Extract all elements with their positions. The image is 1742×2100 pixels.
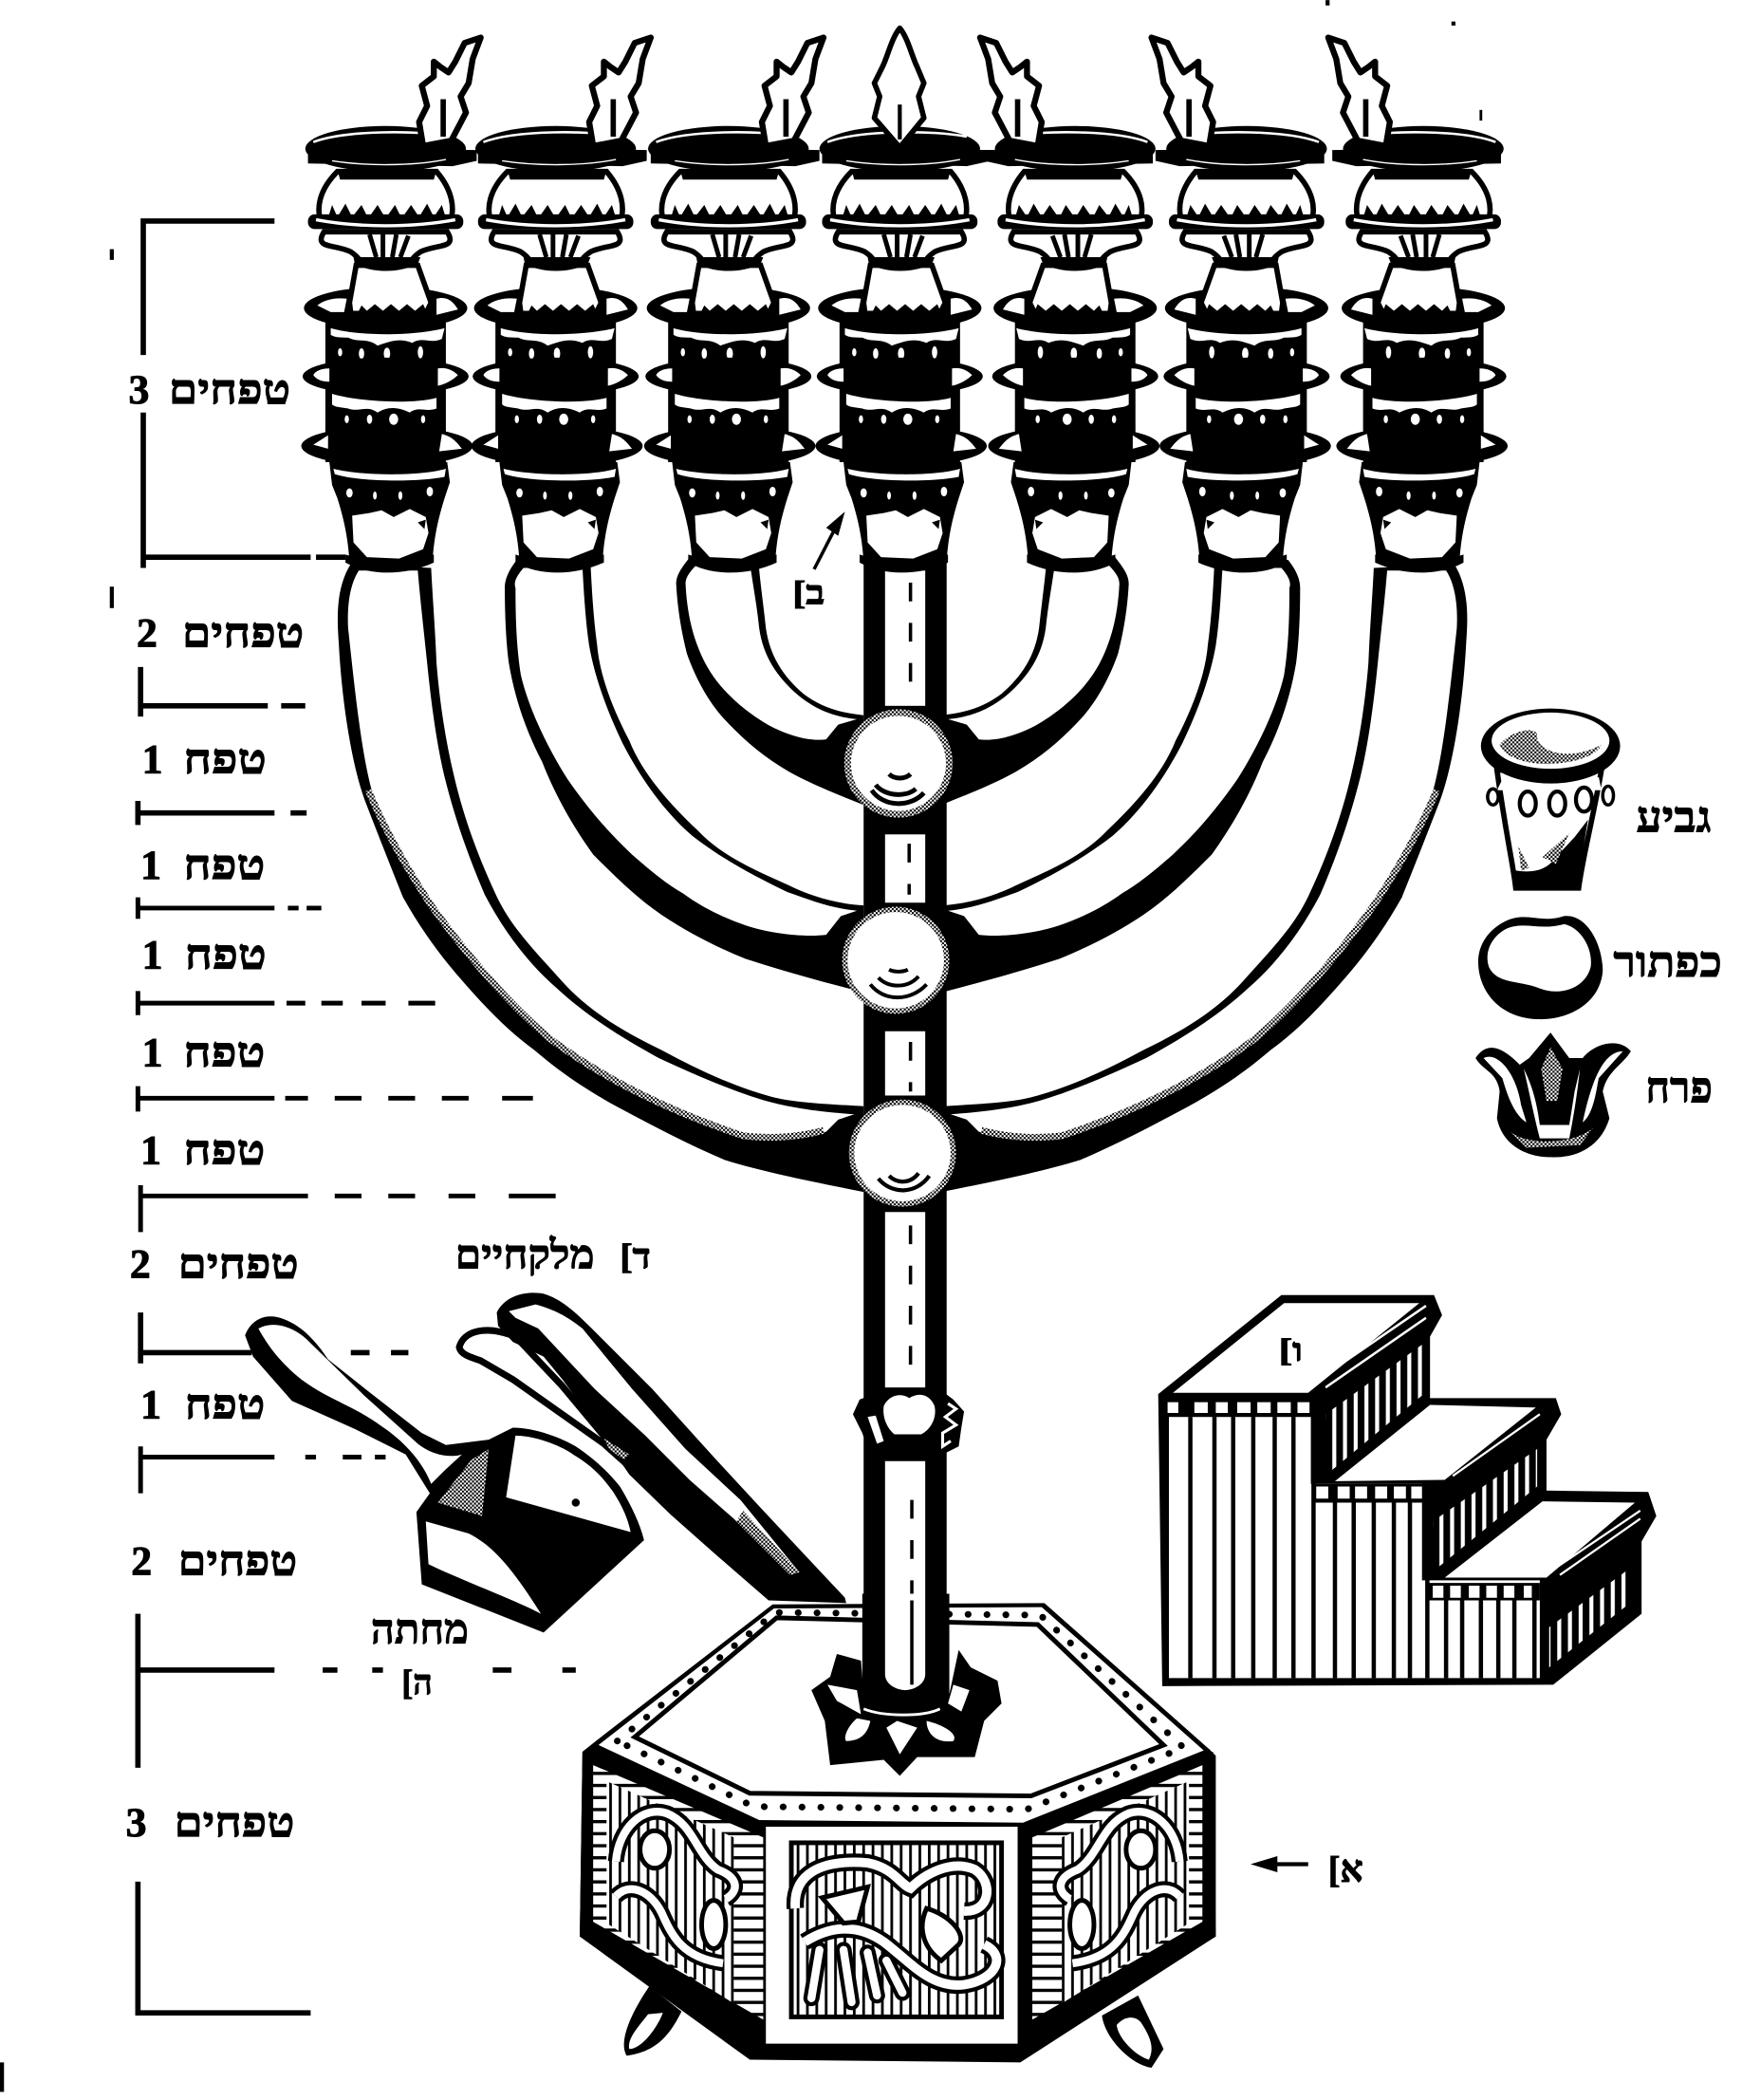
label: 1 tefach row 1: טפח	[183, 736, 267, 782]
dimension scale: left measurement column	[126, 221, 576, 2013]
stem lower over base	[862, 1593, 950, 1703]
callout: aleph arrow: [א	[1328, 1849, 1363, 1890]
label: 1 tefach row 4	[142, 1030, 265, 1075]
knot: small lower knob	[853, 1387, 964, 1458]
step 3 top	[1445, 1501, 1635, 1578]
label: 1 tefach row 5	[140, 1127, 265, 1173]
top dotted band	[599, 1608, 1204, 1823]
label: 3 tefachim bottom: טפחים	[174, 1800, 294, 1846]
label: 2 tefachim: 2	[137, 611, 158, 657]
label: 3 tefachim top: טפחים	[169, 367, 290, 413]
menorah central stem	[863, 552, 947, 1703]
label: 1 tefach row 6: 1	[140, 1383, 161, 1428]
label: malkachayim (tongs): [ד	[620, 1237, 651, 1276]
icon: kaftor knob	[1478, 916, 1603, 1019]
label: 1 tefach row 2	[140, 843, 265, 888]
label: 1 tefach row 1: 1	[142, 736, 162, 782]
label: machta: [ה	[401, 1663, 433, 1701]
label: 1 tefach row 4: 1	[142, 1030, 162, 1075]
front panel	[766, 1827, 1018, 2044]
upper arm and blade	[497, 1292, 846, 1603]
side risers	[1325, 1345, 1422, 1473]
step 2 top	[1335, 1404, 1536, 1481]
tick: 749	[138, 991, 436, 1015]
step 1 top	[1173, 1303, 1419, 1393]
label: 3 tefachim top	[128, 367, 290, 413]
label: 2 tefachim	[137, 611, 304, 657]
upper arm highlight	[509, 1305, 799, 1575]
label: 3 tefachim bottom	[126, 1800, 294, 1846]
label: vav: [ו	[1279, 1333, 1303, 1368]
tick: 1247	[138, 1614, 576, 1768]
knob: upper	[847, 713, 950, 814]
icon: gavia cup	[1481, 709, 1621, 888]
label: perach: פרח	[1645, 1065, 1713, 1112]
label: 2 tefachim lower: טפחים	[178, 1241, 299, 1287]
tick: 1010	[140, 1312, 408, 1364]
label: 2 tefachim lower	[130, 1241, 299, 1287]
callout: bet arrow: [ב	[792, 575, 825, 612]
base body	[580, 1603, 1215, 2062]
label: kaftor: כפתור	[1614, 938, 1722, 986]
callout: bet arrow	[792, 511, 844, 612]
label: 3 tefachim top: 3	[128, 367, 149, 413]
menorah knobs	[844, 713, 964, 1458]
label: 1 tefach row 4: טפח	[183, 1030, 265, 1075]
menorah branches	[338, 553, 1467, 1192]
label: gavia: גביע	[1637, 793, 1712, 841]
step silhouette	[1158, 1295, 1657, 1686]
label: machta: מחתה	[371, 1608, 469, 1653]
label: 1 tefach row 6: טפח	[185, 1383, 265, 1428]
icon: perach flower	[1475, 1032, 1631, 1158]
knob: middle	[844, 909, 947, 1012]
label: 1 tefach row 6	[140, 1383, 265, 1428]
knob: lower	[852, 1103, 954, 1204]
side panels	[580, 1752, 763, 2025]
icon: stem base flower	[811, 1650, 1002, 1775]
label: 2 tefachim third: טפחים	[178, 1539, 297, 1585]
lamps row	[302, 28, 1508, 572]
tick: 820	[138, 1087, 533, 1111]
lamp 7	[1328, 38, 1508, 572]
label: malkachayim (tongs)	[455, 1234, 651, 1278]
bracket: top section	[143, 221, 345, 567]
feet	[624, 1986, 1163, 2068]
label: 2 tefachim third: 2	[131, 1539, 152, 1585]
label: 1 tefach row 1	[142, 736, 267, 782]
tick: 607	[138, 801, 306, 825]
tick: 1088	[140, 1446, 385, 1494]
blade stipple	[603, 1439, 799, 1575]
label: 2 tefachim lower: 2	[130, 1241, 151, 1287]
icon: three steps (kevesh)	[1158, 1295, 1657, 1686]
icon: menorah base	[580, 1603, 1215, 2068]
base top	[635, 1618, 1163, 1796]
icon: tongs	[459, 1292, 846, 1603]
bracket: bottom section	[138, 1882, 310, 2013]
lamp 4 center	[815, 28, 991, 572]
lamp 3	[644, 38, 824, 572]
label: 3 tefachim bottom: 3	[126, 1800, 147, 1846]
label: 1 tefach row 2: 1	[140, 843, 161, 888]
lamp 2	[472, 38, 651, 572]
label: machta	[371, 1608, 469, 1701]
label: 1 tefach row 5: טפח	[183, 1127, 265, 1173]
tick: 527	[140, 667, 306, 716]
tick: 678	[138, 898, 322, 919]
label: 1 tefach row 2: טפח	[183, 843, 265, 888]
label: 1 tefach row 5: 1	[140, 1127, 161, 1173]
label: malkachayim (tongs): מלקחיים	[455, 1234, 595, 1278]
tick: 893	[140, 1185, 556, 1232]
label: 1 tefach row 3: טפח	[185, 932, 267, 977]
lamp 6	[1152, 38, 1331, 572]
label: 1 tefach row 3	[142, 932, 267, 977]
label: 1 tefach row 3: 1	[142, 932, 162, 977]
dots	[618, 1612, 1184, 1810]
lower arm	[459, 1330, 629, 1466]
front fluting	[1169, 1417, 1540, 1678]
lamp 1	[302, 38, 481, 572]
lamp 5	[980, 38, 1159, 572]
legend: gavia, kaftor, perach	[1475, 709, 1722, 1158]
label: 2 tefachim third	[131, 1539, 297, 1585]
callout: aleph arrow	[1251, 1849, 1363, 1890]
icon: machta (fire pan)	[245, 1316, 644, 1632]
label: 2 tefachim: טפחים	[182, 611, 304, 657]
